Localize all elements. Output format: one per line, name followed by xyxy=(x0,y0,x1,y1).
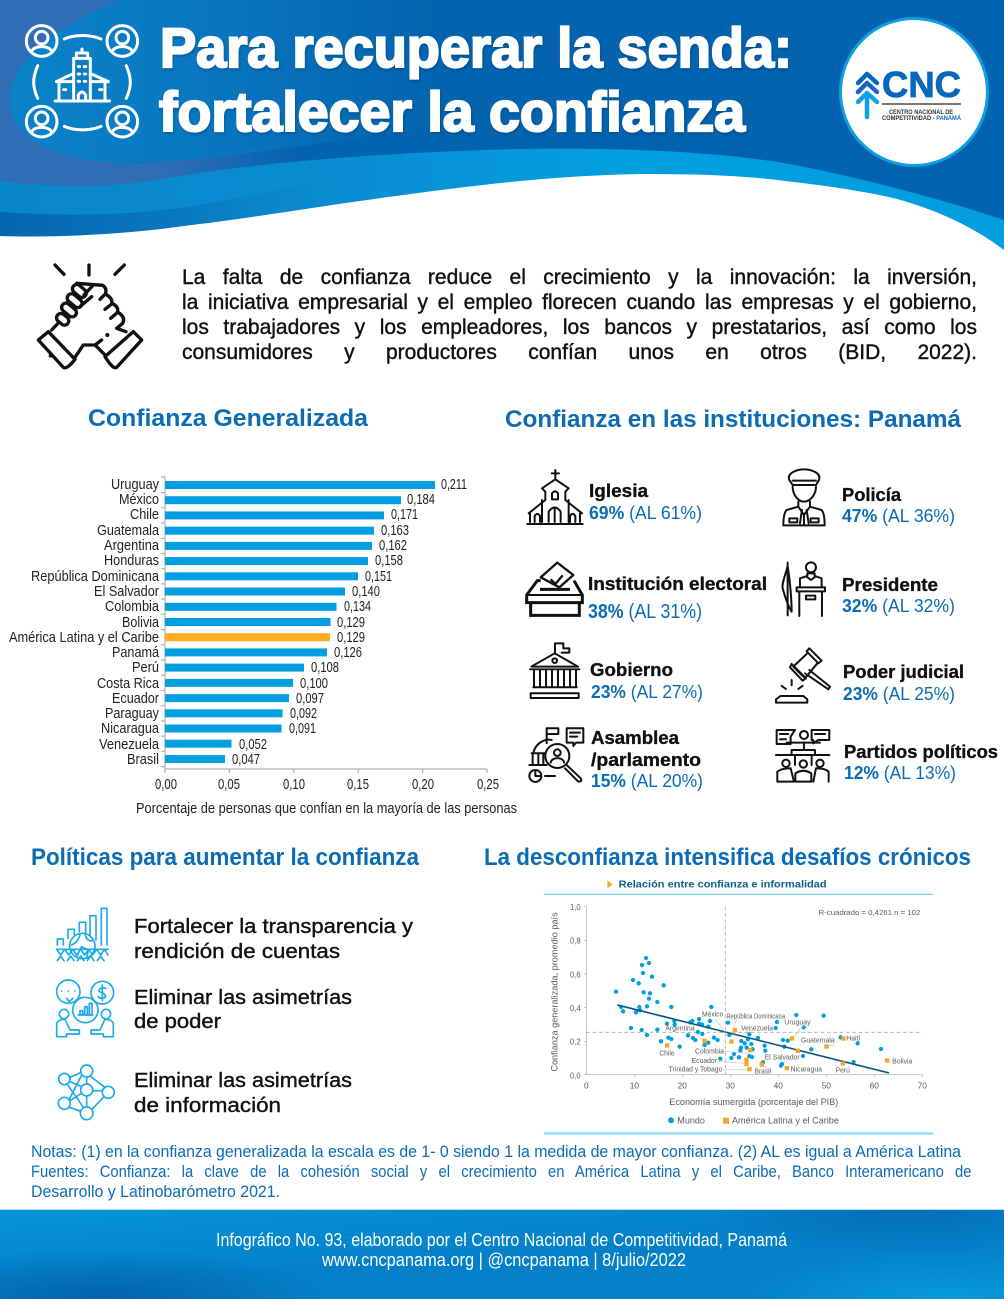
scatter labels: Trinidad y Tobago xyxy=(669,1065,722,1074)
scatter chart: confianza e informalidad xyxy=(544,880,933,1135)
scatter axes text: Confianza generalizada, promedio país xyxy=(549,912,559,1072)
world dots xyxy=(614,956,883,1068)
label: partidos politicos: Partidos políticos xyxy=(844,742,998,762)
label: gobierno: 23% (AL 27%) xyxy=(591,682,703,702)
scatter axes text: 20 xyxy=(678,1080,687,1090)
heading: confianza generalizada: Confianza Generalizada xyxy=(88,405,369,432)
text: informacion xyxy=(134,1069,352,1117)
scatter labels: República Dominicana xyxy=(726,1011,786,1020)
trend line xyxy=(617,1005,889,1073)
country labels: Honduras xyxy=(104,553,159,569)
scatter axes text: 0,8 xyxy=(570,936,581,946)
title: Para recuperar la senda: xyxy=(160,16,792,79)
footer: www.cncpanama.org | @cncpanama | 8/julio/2022 xyxy=(321,1250,686,1270)
country labels: Argentina xyxy=(104,538,160,554)
intro text xyxy=(182,266,977,364)
x axis labels: 0,00 xyxy=(155,777,177,793)
icon: policia xyxy=(783,469,825,525)
scatter axes text: 30 xyxy=(726,1080,735,1090)
scatter axes text: 0,6 xyxy=(570,969,581,979)
notes: line 3: Desarrollo y Latinobarómetro 2021. xyxy=(31,1182,280,1201)
country labels: Panamá xyxy=(112,645,160,661)
icon: partidos politicos xyxy=(776,730,829,782)
country labels: República Dominicana xyxy=(31,569,160,585)
country labels: Uruguay xyxy=(111,477,160,493)
label: poder judicial: Poder judicial xyxy=(843,662,964,682)
value labels: 0,140 xyxy=(352,584,380,600)
scatter axes text: 0,2 xyxy=(570,1037,581,1047)
title: fortalecer la confianza xyxy=(159,80,746,143)
scatter axes text: Economía sumergida (porcentaje del PIB) xyxy=(669,1097,838,1107)
scatter labels: Ecuador xyxy=(692,1056,717,1065)
heading: desconfianza: La desconfianza intensifica desafíos crónicos xyxy=(484,844,971,871)
text: transparencia xyxy=(134,915,414,963)
scatter labels: Haití xyxy=(846,1033,861,1042)
scatter axes text: 10 xyxy=(630,1080,639,1090)
value labels: 0,162 xyxy=(379,538,407,554)
scatter legend: América Latina y el Caribe xyxy=(732,1116,839,1126)
country labels xyxy=(9,477,160,768)
notes: line 2: Fuentes: Confianza: la clave de la cohesión social y el crecimiento en América Latina y el Caribe, Banco Interamericano de xyxy=(31,1162,971,1181)
label: asamblea: Asamblea xyxy=(591,728,680,748)
header banner xyxy=(0,0,1004,260)
label: institucion electoral xyxy=(588,574,767,623)
value labels: 0,163 xyxy=(381,523,409,539)
value labels: 0,047 xyxy=(232,752,260,768)
scatter labels: Argentina xyxy=(665,1023,695,1032)
value labels: 0,052 xyxy=(239,737,267,753)
intro text: La falta de confianza reduce el crecimiento y la innovación: la inversión, xyxy=(182,266,977,289)
scatter axes text: 1,0 xyxy=(570,902,581,912)
text: poder: Eliminar las asimetrías xyxy=(134,986,352,1009)
notes: line 1: Notas: (1) en la confianza generalizada la escala es de 1- 0 siendo 1 la medida de mayor confianza. (2) AL es igual a América Latina xyxy=(31,1142,962,1161)
scatter labels xyxy=(659,908,920,1075)
country labels: América Latina y el Caribe xyxy=(9,630,159,646)
scatter labels: Chile xyxy=(659,1048,675,1057)
icon: informacion xyxy=(58,1065,114,1120)
label: gobierno xyxy=(590,660,703,702)
value labels: 0,129 xyxy=(337,630,365,646)
value labels: 0,100 xyxy=(300,676,328,692)
scatter legend xyxy=(668,1116,839,1126)
heading: politicas: Políticas para aumentar la confianza xyxy=(31,844,420,871)
x axis labels: 0,20 xyxy=(412,777,434,793)
bar chart: confianza generalizada xyxy=(9,477,517,817)
country labels: Brasil xyxy=(127,752,159,768)
x axis labels: 0,25 xyxy=(477,777,499,793)
scatter axes text: 0,4 xyxy=(570,1003,581,1013)
label: partidos politicos xyxy=(844,742,998,783)
logo: CNC: CNC xyxy=(882,64,961,105)
scatter axes text: 50 xyxy=(822,1080,831,1090)
scatter axes text: 70 xyxy=(918,1080,927,1090)
logo: CNC xyxy=(840,18,988,166)
x axis labels xyxy=(155,777,499,793)
value labels xyxy=(232,477,467,768)
label: asamblea xyxy=(591,728,703,791)
scatter labels: Perú xyxy=(836,1065,850,1074)
label: iglesia: 69% (AL 61%) xyxy=(589,503,702,523)
value labels: 0,091 xyxy=(289,721,316,737)
country labels: Ecuador xyxy=(112,691,159,707)
value labels: 0,184 xyxy=(407,492,435,508)
country labels: México xyxy=(119,492,159,508)
value labels: 0,211 xyxy=(441,477,467,493)
icon: poder judicial xyxy=(776,648,830,703)
label: asamblea: 15% (AL 20%) xyxy=(591,771,703,791)
text: informacion: de información xyxy=(134,1094,281,1117)
label: presidente: 32% (AL 32%) xyxy=(842,596,955,616)
x axis title: Porcentaje de personas que confían en la mayoría de las personas xyxy=(136,801,517,817)
scatter labels: El Salvador xyxy=(765,1053,800,1062)
icon: poder xyxy=(57,980,114,1037)
text: transparencia: Fortalecer la transparencia y xyxy=(134,915,414,938)
icon: asamblea xyxy=(529,728,583,782)
logo: CNC: CENTRO NACIONAL DE xyxy=(889,109,954,116)
label: institucion electoral: 38% (AL 31%) xyxy=(588,601,702,623)
intro text: la iniciativa empresarial y el empleo florecen cuando las empresas y el gobierno, xyxy=(182,291,977,314)
text: transparencia: rendición de cuentas xyxy=(134,940,340,963)
scatter axes text: 60 xyxy=(870,1080,879,1090)
LAC squares xyxy=(665,1028,889,1071)
scatter labels: Venezuela xyxy=(741,1023,774,1032)
value labels: 0,108 xyxy=(311,660,339,676)
scatter labels: Colombia xyxy=(695,1046,725,1055)
country labels: Venezuela xyxy=(99,737,160,753)
logo: CNC: COMPETITIVIDAD - PANAMÁ xyxy=(882,113,961,122)
value labels: 0,158 xyxy=(375,553,403,569)
value labels: 0,092 xyxy=(290,706,317,722)
x axis labels: 0,05 xyxy=(218,777,240,793)
country labels: Bolivia xyxy=(122,615,160,631)
value labels: 0,134 xyxy=(344,599,371,615)
label: presidente: Presidente xyxy=(842,575,938,595)
label: policia: 47% (AL 36%) xyxy=(842,506,955,526)
label: policia: Policía xyxy=(842,485,902,505)
panel: politicas xyxy=(57,908,414,1120)
scatter axes text: 0,0 xyxy=(570,1070,581,1080)
label: asamblea: /parlamento xyxy=(591,750,701,770)
value labels: 0,171 xyxy=(391,507,418,523)
scatter labels: México xyxy=(702,1010,723,1019)
icon: urna electoral xyxy=(527,563,582,615)
label: poder judicial: 23% (AL 25%) xyxy=(843,684,955,704)
title xyxy=(159,16,792,143)
leader lines xyxy=(693,1019,835,1072)
label: presidente xyxy=(842,575,955,616)
scatter labels: Uruguay xyxy=(784,1018,811,1027)
scatter labels: Bolivia xyxy=(892,1057,913,1066)
country labels: Paraguay xyxy=(105,706,160,722)
x axis labels: 0,15 xyxy=(347,777,369,793)
scatter labels: Guatemala xyxy=(801,1035,835,1044)
x axis labels: 0,10 xyxy=(283,777,305,793)
scatter axes text: 40 xyxy=(774,1080,783,1090)
scatter chart: confianza e informalidad: Relación entre confianza e informalidad xyxy=(619,880,827,891)
panel: instituciones xyxy=(527,469,998,791)
scatter labels: R-cuadrado = 0,4261 n = 102 xyxy=(819,908,920,917)
text: informacion: Eliminar las asimetrías xyxy=(134,1069,352,1092)
icon: presidente xyxy=(782,562,825,616)
icon: handshake xyxy=(38,265,142,368)
intro text: consumidores y productores confían unos en otros (BID, 2022). xyxy=(182,341,977,364)
icon: gobierno xyxy=(530,643,579,698)
text: poder xyxy=(134,986,352,1033)
footer: Infográfico No. 93, elaborado por el Centro Nacional de Competitividad, Panamá xyxy=(216,1230,788,1250)
scatter labels: Brasil xyxy=(755,1066,771,1075)
country labels: Guatemala xyxy=(97,523,160,539)
label: poder judicial xyxy=(843,662,964,704)
country labels: El Salvador xyxy=(94,584,159,600)
label: gobierno: Gobierno xyxy=(590,660,673,680)
label: iglesia xyxy=(589,481,702,523)
icon: transparencia xyxy=(57,908,108,961)
country labels: Costa Rica xyxy=(97,676,160,692)
label: institucion electoral: Institución electoral xyxy=(588,574,767,594)
icon: iglesia xyxy=(527,470,583,524)
country labels: Nicaragua xyxy=(101,721,160,737)
scatter legend: Mundo xyxy=(677,1116,705,1126)
value labels: 0,126 xyxy=(334,645,362,661)
footer xyxy=(0,1209,1004,1299)
value labels: 0,151 xyxy=(365,569,392,585)
label: iglesia: Iglesia xyxy=(589,481,649,501)
value labels: 0,129 xyxy=(337,615,365,631)
text: poder: de poder xyxy=(134,1010,221,1033)
country labels: Chile xyxy=(130,507,159,523)
scatter labels: Nicaragua xyxy=(791,1064,823,1073)
label: partidos politicos: 12% (AL 13%) xyxy=(844,763,956,783)
scatter axes text: 0 xyxy=(584,1080,589,1090)
heading: confianza en las instituciones: Confianza en las instituciones: Panamá xyxy=(505,406,962,433)
scatter axes text xyxy=(549,902,927,1107)
value labels: 0,097 xyxy=(296,691,324,707)
country labels: Perú xyxy=(132,660,159,676)
bars xyxy=(165,481,435,763)
country labels: Colombia xyxy=(105,599,160,615)
intro text: los trabajadores y los empleadores, los bancos y prestatarios, así como los xyxy=(182,316,977,339)
icon: people around building xyxy=(26,26,138,137)
label: policia xyxy=(842,485,955,526)
